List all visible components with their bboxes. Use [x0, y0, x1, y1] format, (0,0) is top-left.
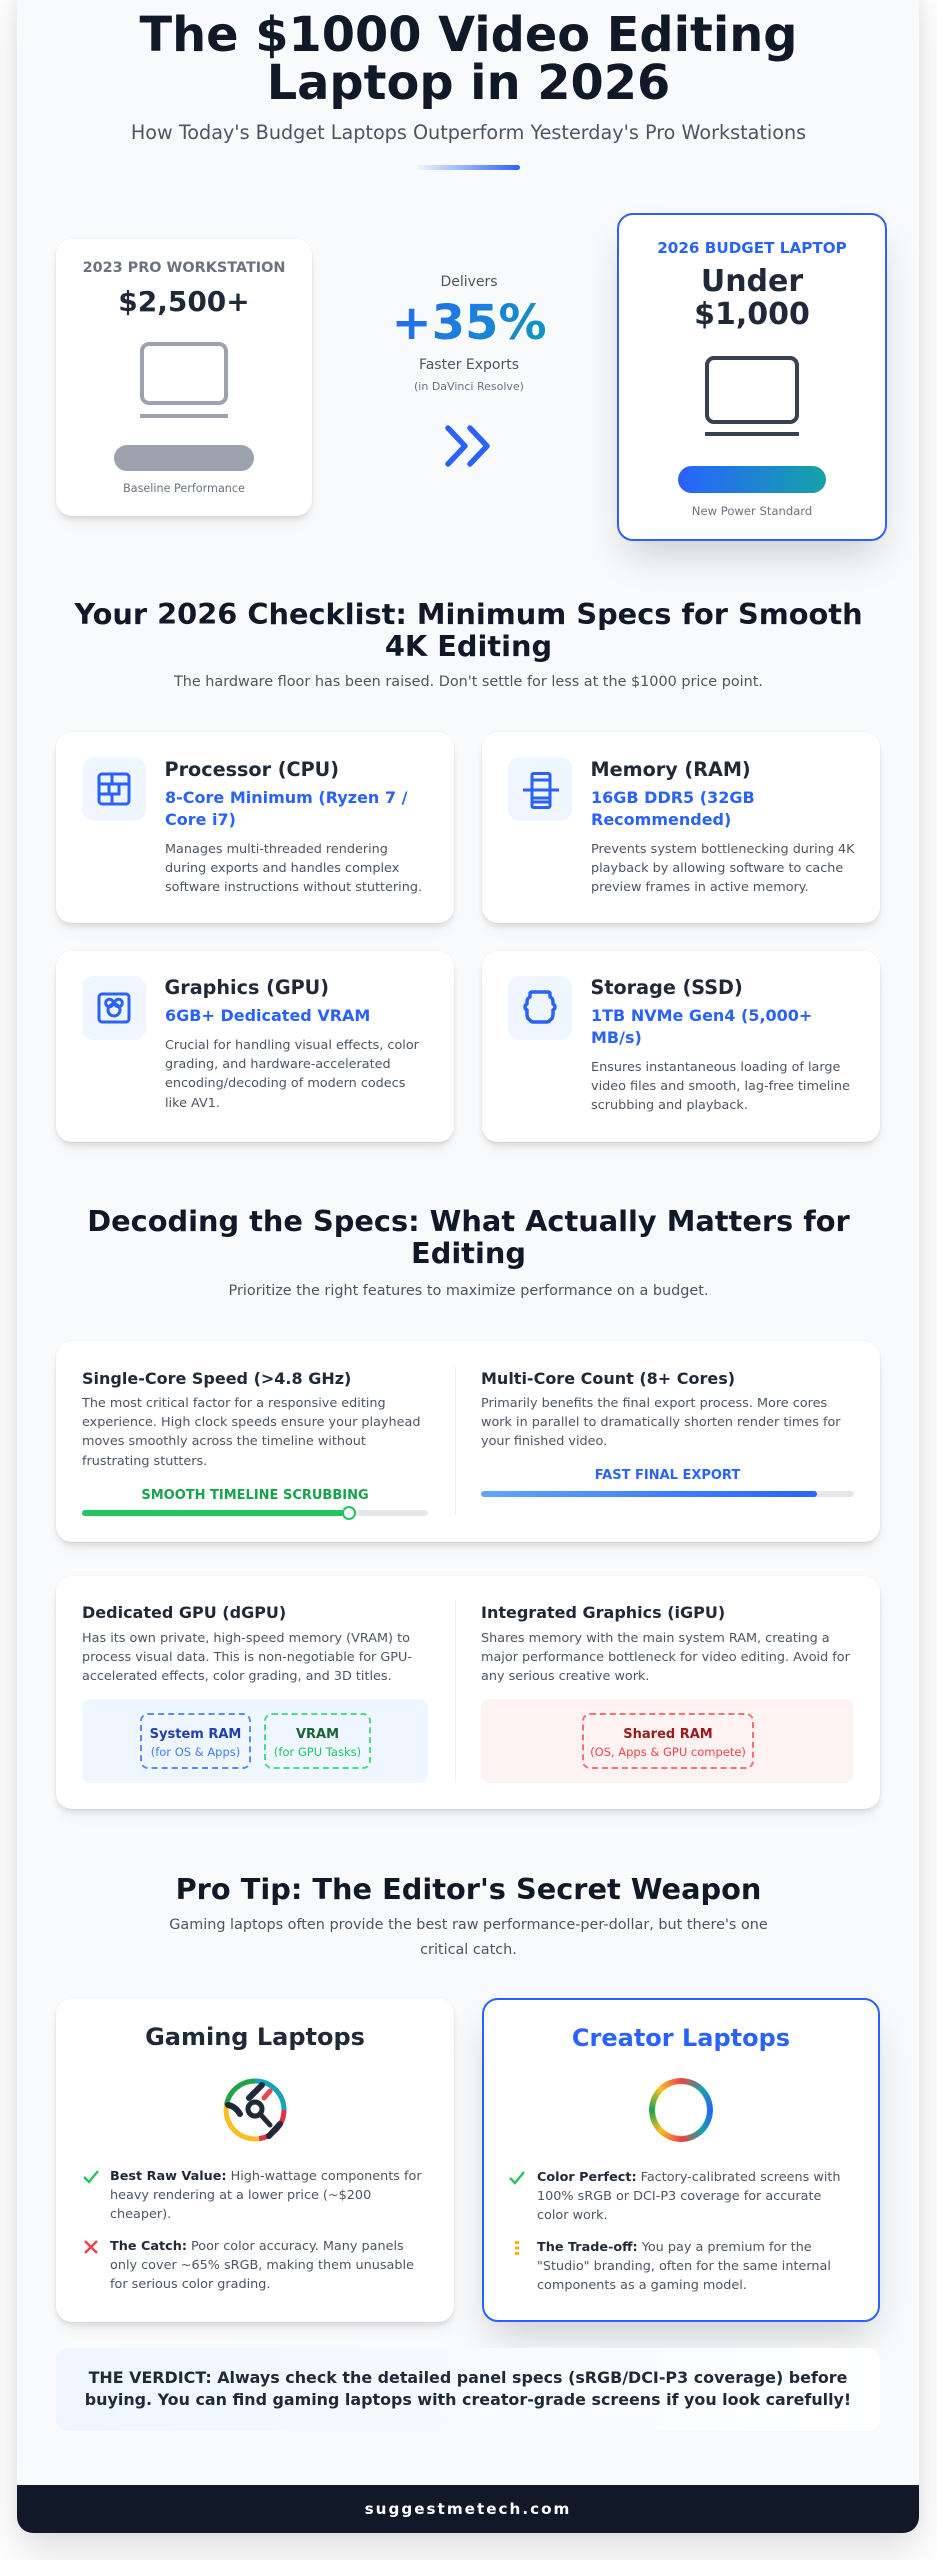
the trade-off text: "Studio" branding, often for the same internal — [537, 2259, 831, 2274]
storage title: Storage (SSD) — [590, 976, 743, 999]
pro tip subheading — [169, 1917, 768, 1958]
heading: decoding the specs — [87, 1204, 850, 1270]
heading: checklist: Your 2026 Checklist: Minimum Specs for Smooth — [74, 597, 863, 631]
the trade-off text — [537, 2240, 831, 2293]
color perfect text: Color Perfect: Factory-calibrated screens with — [537, 2170, 841, 2185]
dgpu description: accelerated effects, color grading, and 3D titles. — [82, 1669, 392, 1684]
warning: the trade-off — [515, 2241, 519, 2255]
color perfect text: 100% sRGB or DCI-P3 coverage for accurate — [537, 2189, 821, 2204]
new power caption: New Power Standard — [692, 504, 812, 518]
memory spec — [591, 788, 755, 829]
smooth scrubbing label: SMOOTH TIMELINE SCRUBBING — [141, 1488, 369, 1503]
processor spec: Core i7) — [165, 810, 236, 829]
dgpu description: process visual data. This is non-negotiable for GPU- — [82, 1650, 412, 1665]
panel: gpu comparison — [56, 1576, 880, 1809]
heading: checklist — [74, 597, 863, 663]
processor spec: 8-Core Minimum (Ryzen 7 / — [165, 788, 407, 807]
vram box: (for GPU Tasks) — [274, 1745, 361, 1759]
storage description: video files and smooth, lag-free timeline — [591, 1079, 850, 1094]
icon: color wheel with tools — [224, 2078, 286, 2142]
color perfect text — [537, 2170, 841, 2223]
panel: storage — [482, 951, 880, 1142]
icon: colour ring — [649, 2078, 713, 2142]
title underline — [417, 165, 520, 170]
fast export label: FAST FINAL EXPORT — [595, 1468, 740, 1483]
panel: graphics — [56, 951, 454, 1142]
verdict text: THE VERDICT: Always check the detailed panel specs (sRGB/DCI-P3 coverage) before — [89, 2368, 847, 2387]
memory spec: Recommended) — [591, 810, 731, 829]
footer — [17, 2485, 919, 2533]
panel: 2023 pro workstation — [56, 239, 312, 516]
processor description: Manages multi-threaded rendering — [165, 842, 388, 857]
graphics spec: 6GB+ Dedicated VRAM — [165, 1006, 370, 1025]
panel: 2026 budget laptop — [617, 213, 887, 541]
graphics description — [165, 1038, 419, 1111]
shared ram box — [582, 1713, 754, 1769]
workstation price: $2,500+ — [118, 285, 250, 318]
check: best raw value — [83, 2170, 99, 2184]
processor description: software instructions without stuttering. — [165, 880, 422, 895]
panel: creator laptops — [482, 1998, 880, 2322]
verdict text — [85, 2368, 851, 2409]
storage description: scrubbing and playback. — [591, 1098, 748, 1113]
heading: checklist: 4K Editing — [385, 629, 552, 663]
shared ram box: Shared RAM — [623, 1727, 713, 1742]
memory description — [591, 842, 855, 895]
memory spec: 16GB DDR5 (32GB — [591, 788, 755, 807]
dgpu description — [82, 1631, 412, 1684]
best raw value text: heavy rendering at a lower price (~$200 — [110, 2188, 371, 2203]
multi-core description — [481, 1396, 841, 1449]
icon: grey laptop — [140, 342, 228, 418]
processor description: during exports and handles complex — [165, 861, 399, 876]
column divider — [455, 1367, 456, 1515]
faster exports label: Faster Exports — [419, 357, 519, 373]
the catch text: for serious color grading. — [110, 2277, 270, 2292]
single-core description: moves smoothly across the timeline without — [82, 1434, 366, 1449]
heading: decoding the specs: Decoding the Specs: What Actually Matters for — [87, 1204, 850, 1238]
shared ram box: (OS, Apps & GPU compete) — [590, 1745, 746, 1759]
best raw value text: cheaper). — [110, 2207, 171, 2222]
the catch text: The Catch: Poor color accuracy. Many panels — [110, 2239, 404, 2254]
vram box: VRAM — [296, 1727, 339, 1742]
best raw value text — [110, 2169, 422, 2222]
vram box — [264, 1713, 371, 1769]
single-core description: The most critical factor for a responsive editing — [82, 1396, 386, 1411]
stat: +35%: +35% — [391, 295, 547, 351]
memory title: Memory (RAM) — [590, 758, 751, 781]
system ram box: (for OS & Apps) — [151, 1745, 240, 1759]
verdict text: buying. You can find gaming laptops with creator-grade screens if you look carefully! — [85, 2390, 851, 2409]
memory description: preview frames in active memory. — [591, 880, 809, 895]
icon: gpu — [82, 976, 146, 1040]
processor spec — [165, 788, 408, 829]
single-core description: experience. High clock speeds ensure your playhead — [82, 1415, 420, 1430]
the catch text: only cover ~65% sRGB, making them unusable — [110, 2258, 414, 2273]
graphics title: Graphics (GPU) — [164, 976, 329, 999]
panel: performance delta — [391, 274, 547, 467]
budget price: Under — [701, 264, 803, 299]
best raw value text: Best Raw Value: High-wattage components for — [110, 2169, 422, 2184]
budget price: $1,000 — [694, 297, 810, 332]
icon: dark laptop — [705, 356, 799, 436]
storage spec — [591, 1006, 812, 1047]
igpu title: Integrated Graphics (iGPU) — [481, 1603, 725, 1622]
delivers label: Delivers — [440, 274, 498, 290]
title: Laptop in 2026 — [267, 56, 670, 111]
dgpu title: Dedicated GPU (dGPU) — [82, 1603, 286, 1622]
budget label: 2026 BUDGET LAPTOP — [657, 239, 847, 257]
igpu description: any serious creative work. — [481, 1669, 649, 1684]
timeline playhead — [342, 1506, 356, 1520]
budget price — [694, 264, 810, 332]
new power bar — [678, 466, 826, 493]
igpu memory diagram — [481, 1699, 854, 1783]
multi-core description: Primarily benefits the final export process. More cores — [481, 1396, 827, 1411]
panel: gaming laptops — [56, 1998, 454, 2322]
resolve note: (in DaVinci Resolve) — [414, 380, 524, 393]
the catch text — [110, 2239, 414, 2292]
heading: decoding the specs: Editing — [411, 1236, 526, 1270]
icon: ssd — [508, 976, 572, 1040]
pro tip subheading: critical catch. — [420, 1942, 517, 1958]
multi-core description: work in parallel to dramatically shorten render times for — [481, 1415, 841, 1430]
baseline caption: Baseline Performance — [123, 482, 245, 495]
storage spec: 1TB NVMe Gen4 (5,000+ — [591, 1006, 812, 1025]
decoding subheading: Prioritize the right features to maximize performance on a budget. — [229, 1283, 708, 1299]
memory description: playback by allowing software to cache — [591, 861, 843, 876]
graphics description: grading, and hardware-accelerated — [165, 1057, 391, 1072]
the trade-off text: components as a gaming model. — [537, 2278, 747, 2293]
the trade-off text: The Trade-off: You pay a premium for the — [537, 2240, 812, 2255]
title — [140, 8, 797, 111]
storage description: Ensures instantaneous loading of large — [591, 1060, 840, 1075]
processor title: Processor (CPU) — [164, 758, 339, 781]
system ram box — [140, 1713, 251, 1769]
title: The $1000 Video Editing — [140, 8, 797, 63]
system ram box: System RAM — [150, 1727, 241, 1742]
column divider — [455, 1600, 456, 1783]
processor description — [165, 842, 422, 895]
single-core title: Single-Core Speed (>4.8 GHz) — [82, 1369, 351, 1388]
workstation label: 2023 PRO WORKSTATION — [83, 260, 285, 276]
cross: the catch — [84, 2240, 98, 2254]
panel: processor — [56, 732, 454, 923]
igpu description — [481, 1631, 850, 1684]
storage description — [591, 1060, 850, 1113]
graphics description: like AV1. — [165, 1096, 220, 1111]
subtitle: How Today's Budget Laptops Outperform Yesterday's Pro Workstations — [131, 121, 806, 144]
panel: memory — [482, 732, 880, 923]
graphics description: encoding/decoding of modern codecs — [165, 1076, 405, 1091]
callout: verdict — [56, 2348, 880, 2431]
graphics description: Crucial for handling visual effects, color — [165, 1038, 419, 1053]
storage spec: MB/s) — [591, 1028, 642, 1047]
arrow: double chevron — [445, 425, 490, 467]
igpu description: Shares memory with the main system RAM, creating a — [481, 1631, 830, 1646]
multi-core title: Multi-Core Count (8+ Cores) — [481, 1369, 735, 1388]
timeline fill — [82, 1510, 344, 1516]
dgpu description: Has its own private, high-speed memory (VRAM) to — [82, 1631, 410, 1646]
export bar — [481, 1491, 854, 1497]
checklist subheading: The hardware floor has been raised. Don't settle for less at the $1000 price point. — [174, 674, 763, 690]
heading: pro tip: Pro Tip: The Editor's Secret Weapon — [176, 1872, 761, 1906]
dgpu memory diagram — [82, 1699, 428, 1783]
single-core description: frustrating stutters. — [82, 1454, 207, 1469]
memory description: Prevents system bottlenecking during 4K — [591, 842, 855, 857]
color perfect text: color work. — [537, 2208, 608, 2223]
timeline bar — [82, 1510, 428, 1516]
export fill — [481, 1491, 817, 1497]
pro tip subheading: Gaming laptops often provide the best raw performance-per-dollar, but there's one — [169, 1917, 768, 1933]
check: color perfect — [509, 2171, 525, 2185]
gaming title: Gaming Laptops — [145, 2023, 365, 2051]
igpu description: major performance bottleneck for video editing. Avoid for — [481, 1650, 850, 1665]
baseline performance bar — [114, 445, 254, 471]
panel: cpu speed comparison — [56, 1341, 880, 1542]
creator title: Creator Laptops — [572, 2024, 790, 2052]
multi-core description: your finished video. — [481, 1434, 607, 1449]
icon: ram — [508, 757, 572, 821]
single-core description — [82, 1396, 420, 1469]
footer url: suggestmetech.com — [365, 2500, 571, 2518]
icon: cpu — [82, 757, 146, 821]
